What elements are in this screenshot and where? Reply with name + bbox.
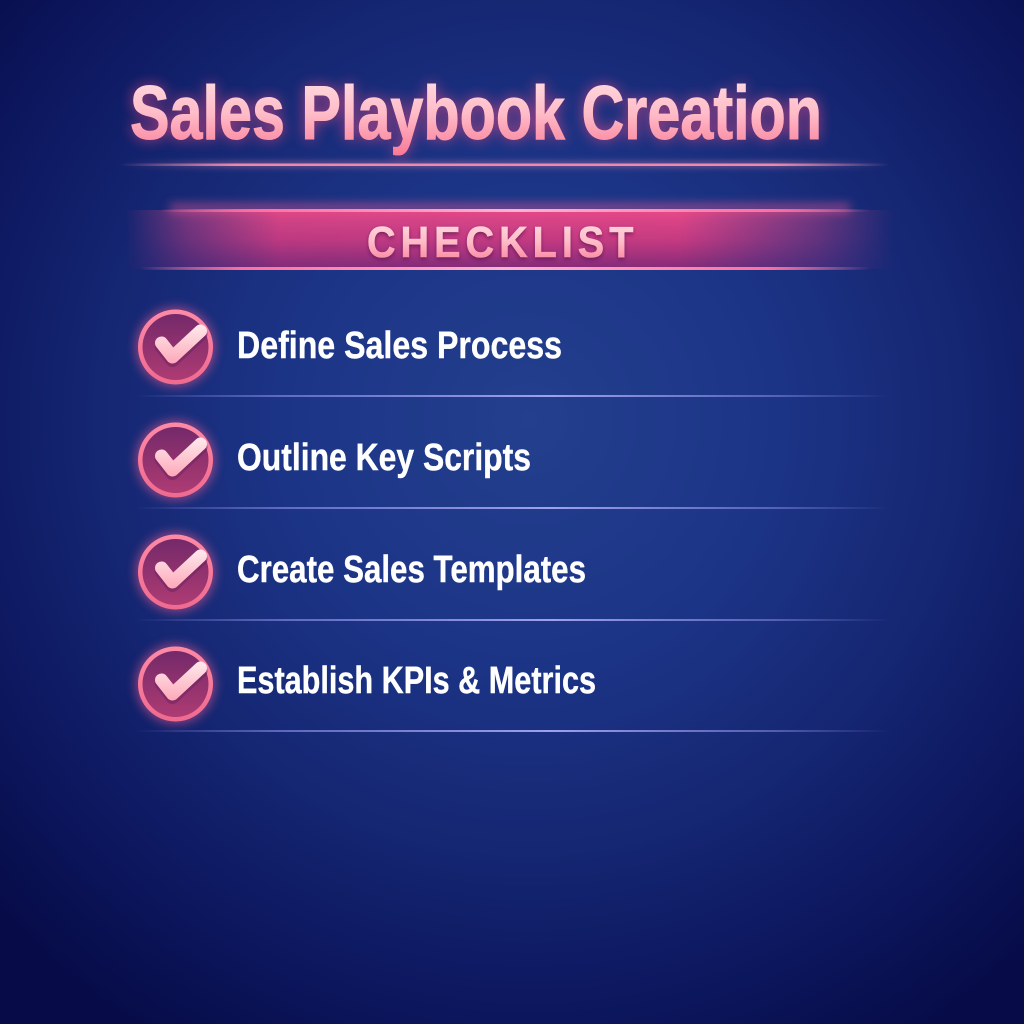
icon: check badge 1 — [136, 307, 216, 387]
label: create sales templates: Create Sales Templates — [237, 549, 586, 591]
banner heading: CHECKLIST — [367, 219, 634, 268]
checklist banner — [125, 204, 895, 270]
label: establish kpis and metrics: Establish KPIs & Metrics — [237, 660, 596, 702]
title: Sales Playbook Creation — [130, 71, 822, 156]
icon: check badge 4 — [136, 644, 216, 724]
icon: check badge 3 — [136, 532, 216, 612]
title: Sales Playbook Creation — [130, 71, 822, 156]
label: define sales process: Define Sales Process — [237, 325, 562, 367]
checklist item 2 — [136, 420, 531, 500]
checklist item 4 — [136, 644, 596, 724]
title underline — [120, 161, 890, 168]
checklist item 1 — [136, 307, 562, 387]
label: outline key scripts: Outline Key Scripts — [237, 437, 531, 479]
banner heading: CHECKLIST — [367, 217, 634, 266]
checklist item 3 — [136, 532, 586, 612]
icon: check badge 2 — [136, 420, 216, 500]
